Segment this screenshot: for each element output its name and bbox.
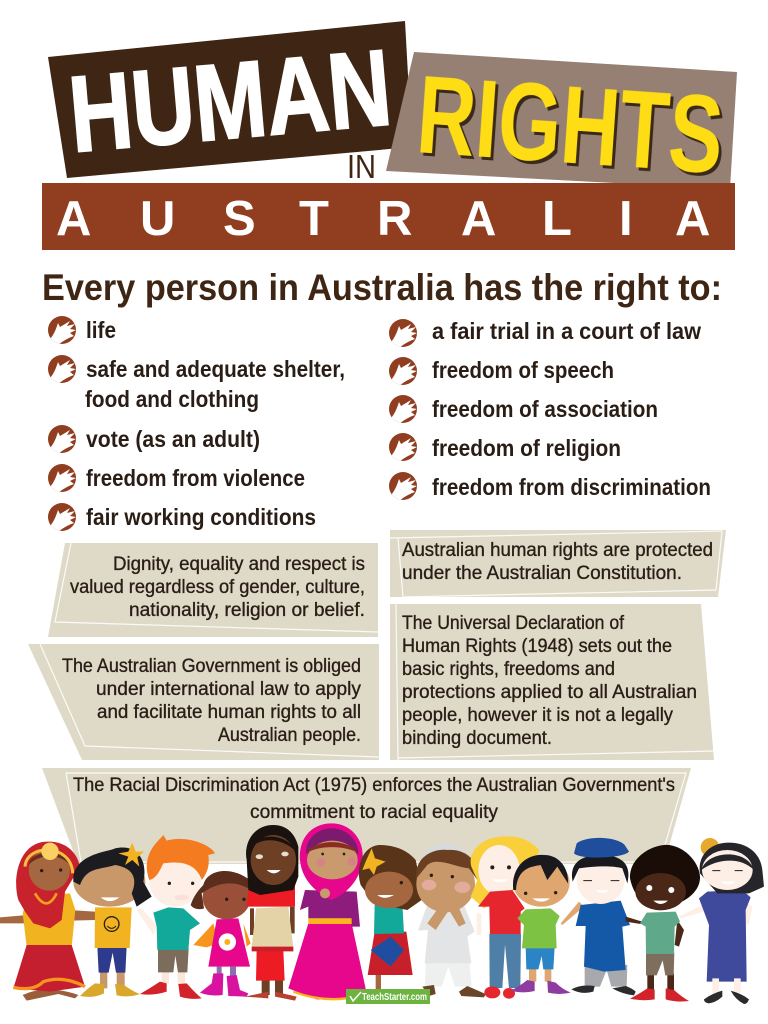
list item: association: freedom of association xyxy=(432,396,658,422)
child: girl with cream apron xyxy=(245,825,298,1001)
panel: government: under international law to apply xyxy=(96,679,361,700)
child: girl with curly hair and patterned skirt xyxy=(359,845,424,990)
child: girl with smiley shirt xyxy=(73,843,152,997)
list item: shelter, food and clothing xyxy=(48,355,345,412)
list item: religion: freedom of religion xyxy=(432,435,621,461)
panel: constitution xyxy=(390,530,726,597)
child: boy with blue hat xyxy=(571,838,636,995)
list item: speech: freedom of speech xyxy=(432,357,614,383)
panel: dignity xyxy=(48,543,378,637)
title: Human Rights in Australia xyxy=(42,21,737,250)
list item: speech xyxy=(389,357,614,386)
panel: racial discrimination act: The Racial Discrimination Act (1975) enforces the Australian Government's xyxy=(73,775,675,796)
panel: government: The Australian Government is obliged xyxy=(62,656,361,677)
list item: life: life xyxy=(86,317,116,343)
list item: shelter, food and clothing: food and clothing xyxy=(85,386,259,412)
child: blonde girl in red shirt xyxy=(471,836,539,999)
list item: discrimination: freedom from discrimination xyxy=(432,474,711,500)
list item: freedom from violence xyxy=(48,464,305,493)
panel: constitution: Australian human rights are protected xyxy=(402,540,713,561)
child: girl with pink hijab xyxy=(288,823,367,999)
rights list: right column xyxy=(389,318,711,501)
list item: religion xyxy=(389,433,621,462)
panel: government xyxy=(28,644,379,760)
panel: dignity: valued regardless of gender, culture, xyxy=(70,577,365,598)
list item: vote xyxy=(48,425,260,454)
rights list: left column xyxy=(48,316,345,532)
title band: AUSTRALIA: AUSTRALIA xyxy=(56,192,710,246)
panel: universal declaration: The Universal Declaration of xyxy=(402,613,625,634)
child: girl in blue dress xyxy=(679,838,764,1004)
list item: vote: vote (as an adult) xyxy=(86,426,260,452)
list item: association xyxy=(389,395,658,424)
child: girl in pink dress xyxy=(191,871,251,997)
panel: universal declaration: binding document. xyxy=(402,728,552,749)
heading: Every person in Australia has the right to: xyxy=(42,267,722,308)
panel: dignity: nationality, religion or belief. xyxy=(129,600,365,621)
panel: universal declaration xyxy=(390,604,714,760)
panel: dignity: Dignity, equality and respect is xyxy=(113,554,365,575)
list item: freedom from violence: freedom from violence xyxy=(86,465,305,491)
child: girl in sari xyxy=(0,842,95,1001)
list item: shelter, food and clothing: safe and adequate shelter, xyxy=(86,356,345,382)
panel: universal declaration: protections applied to all Australian xyxy=(402,682,697,703)
panel: government: Australian people. xyxy=(218,725,361,746)
list item: life xyxy=(48,316,116,345)
title panel: HUMAN: HUMAN xyxy=(64,26,396,175)
child: boy with afro xyxy=(626,845,700,1002)
panel: racial discrimination act: commitment to racial equality xyxy=(250,802,498,823)
panel: racial discrimination act xyxy=(42,768,691,864)
panel: government: and facilitate human rights to all xyxy=(97,702,361,723)
list item: fair trial: a fair trial in a court of law xyxy=(432,318,701,344)
child: boy in green shirt xyxy=(511,855,584,994)
panel: universal declaration: Human Rights (1948) sets out the xyxy=(402,636,672,657)
illustration: group of children xyxy=(0,823,764,1004)
logo: Teach Starter xyxy=(346,989,430,1004)
child: boy in white robe xyxy=(416,843,486,997)
panel: universal declaration: people, however it is not a legally xyxy=(402,705,673,726)
logo: Teach Starter: TeachStarter.com xyxy=(362,992,427,1003)
panel: constitution: under the Australian Constitution. xyxy=(402,563,682,584)
list item: fair working conditions: fair working conditions xyxy=(86,504,316,530)
child: boy with orange hair xyxy=(137,835,215,999)
title word: IN: IN xyxy=(347,148,376,185)
panel: universal declaration: basic rights, freedoms and xyxy=(402,659,615,680)
